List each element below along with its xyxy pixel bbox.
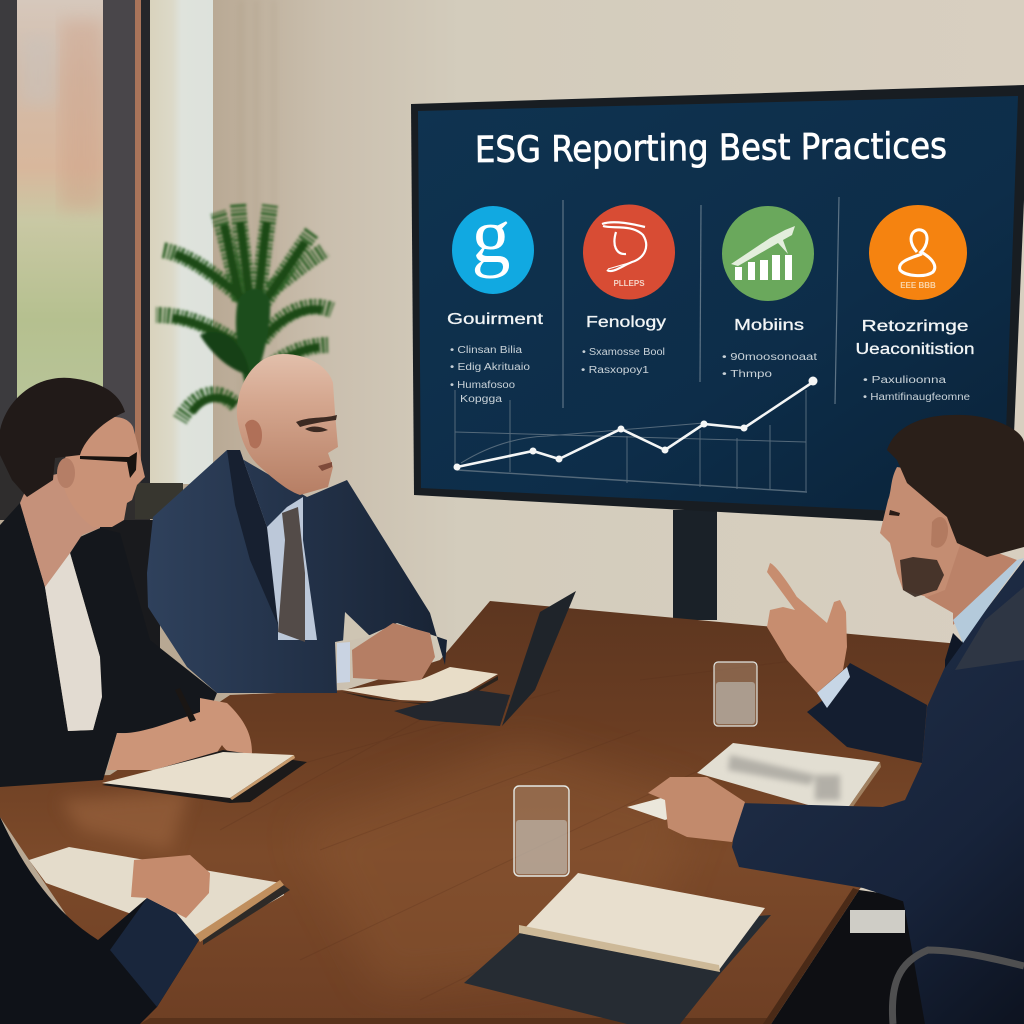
right man lower arm [732, 790, 960, 920]
cuff [337, 642, 350, 683]
column bullet lists: Kopgga [460, 394, 503, 405]
man on the right [767, 415, 1024, 1024]
column bullet lists: • Edig Akrituaio [450, 362, 531, 373]
ear [245, 420, 262, 448]
window reveal [150, 0, 213, 484]
column bullet lists: • Clinsan Bilia [450, 345, 523, 356]
wall gap under arm [343, 612, 370, 642]
neck [925, 530, 1017, 625]
hair [887, 415, 1024, 557]
mouth [318, 462, 332, 471]
woman on the left [0, 378, 252, 787]
ear [931, 517, 948, 548]
water glass front [514, 786, 569, 876]
upper sleeve [807, 663, 927, 763]
column headings [447, 311, 974, 358]
pen [175, 688, 196, 722]
monitor [411, 85, 1024, 528]
monitor stand [673, 510, 717, 620]
icon: governance circle: g [472, 192, 510, 279]
icon: governance circle [452, 192, 534, 294]
sleeve [0, 817, 199, 1024]
head [237, 354, 338, 495]
forearm and hands [107, 698, 252, 773]
column bullet lists: • Sxamosse Bool [582, 347, 665, 358]
bottom left person [0, 817, 290, 1024]
icon: metrics circle [722, 206, 814, 301]
bald man [147, 354, 447, 693]
column bullet lists: • 90moosonoaat [722, 352, 817, 363]
shirt collar [953, 558, 1024, 643]
front notebook stack [464, 873, 771, 1024]
floor shadow beneath table [771, 890, 1024, 1024]
cuff [817, 667, 850, 708]
shirt [240, 450, 317, 640]
icon: technology circle: PLLEPS [613, 279, 645, 288]
potted plant [156, 203, 332, 420]
column headings: Ueaconitistion [856, 341, 974, 358]
beard [900, 557, 944, 597]
window sill [135, 483, 183, 519]
icon: reporting circle [869, 205, 967, 300]
monitor frame [411, 85, 1024, 528]
window with frame [0, 0, 150, 520]
conference table [0, 601, 960, 1024]
notebook [29, 847, 284, 940]
notebook in front of woman [102, 750, 307, 803]
jacket [0, 503, 217, 787]
line chart [454, 376, 818, 492]
column headings: Gouirment [447, 311, 544, 328]
column dividers [563, 197, 839, 408]
notebook in front of bald man [342, 667, 498, 707]
column bullet lists: • Thmpo [722, 369, 773, 380]
hand [131, 855, 210, 918]
column bullet lists: • Hamtifinaugfeomne [863, 392, 970, 403]
laptop [394, 591, 576, 726]
icon: reporting circle: EEE BBB [900, 281, 936, 290]
tie [945, 633, 963, 668]
face [62, 417, 145, 527]
ear [57, 458, 75, 488]
icon: technology circle [583, 204, 675, 300]
water glass back [714, 662, 757, 726]
office chair [850, 910, 1024, 1024]
hair [0, 378, 125, 497]
jacket [147, 450, 447, 693]
eye and brow [296, 415, 337, 432]
column bullet lists [450, 345, 970, 405]
eye [889, 510, 900, 516]
column headings: Fenology [586, 314, 666, 331]
chair behind the woman [100, 520, 160, 710]
column bullet lists: • Paxulioonna [863, 375, 947, 386]
face [880, 467, 960, 597]
blouse [45, 553, 102, 731]
shoulder highlight [955, 587, 1024, 670]
screen title: ESG Reporting Best Practices [475, 126, 947, 171]
curtain folds [238, 0, 276, 400]
jacket body [883, 560, 1024, 1024]
lapel [227, 450, 278, 625]
column headings: Mobiins [734, 317, 804, 334]
neck [20, 470, 100, 587]
document papers [627, 743, 881, 820]
tie [278, 507, 305, 642]
column bullet lists: • Rasxopoy1 [581, 365, 650, 376]
glasses [80, 452, 137, 478]
hand [352, 623, 435, 682]
column headings: Retozrimge [862, 318, 969, 335]
column bullet lists: • Humafosoo [450, 380, 515, 391]
right man lower hand [648, 777, 745, 842]
raised hand [767, 563, 847, 693]
screen [418, 96, 1018, 516]
